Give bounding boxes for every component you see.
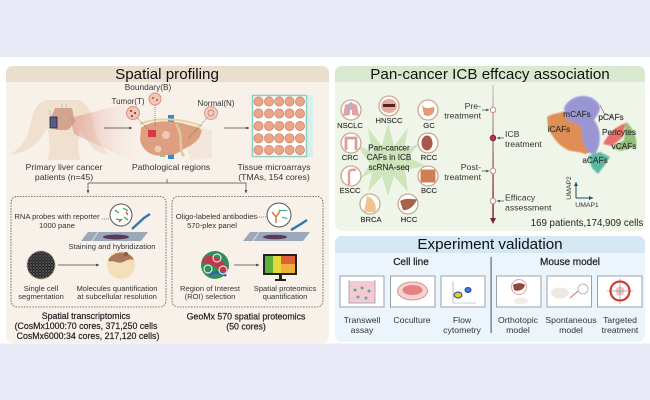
label: single cell segmentation: segmentation xyxy=(18,292,64,301)
label: primary liver cancer patients xyxy=(26,162,102,182)
heading: cell line: Cell line xyxy=(393,257,429,268)
icon: UMAP axes: UMAP1 xyxy=(575,202,599,209)
divider xyxy=(490,257,492,333)
card: transwell assay xyxy=(340,276,384,335)
label: region of interest selection xyxy=(180,284,241,301)
label: oligo-labeled antibodies xyxy=(176,212,257,230)
label: efficacy assessment xyxy=(497,192,552,212)
icon: BRCA breast xyxy=(360,194,382,224)
label: RNA probes xyxy=(14,212,100,230)
icon: GC stomach xyxy=(418,100,438,130)
heading: mouse model: Mouse model xyxy=(540,257,600,268)
labels: UMAP clusters: aCAFs xyxy=(582,155,608,165)
callout: tumor xyxy=(111,97,150,131)
icon: pipette xyxy=(291,220,307,230)
card: spontaneous model: Spontaneous xyxy=(545,315,597,325)
label: oligo-labeled antibodies: Oligo-labeled antibodies xyxy=(176,212,257,221)
text block: GeoMx summary xyxy=(187,312,306,332)
text block: GeoMx summary: (50 cores) xyxy=(226,322,266,332)
callout: boundary: Boundary(B) xyxy=(125,82,172,92)
label: spatial proteomics quantification: Spatial proteomics xyxy=(254,284,316,293)
label: region of interest selection: (ROI) selection xyxy=(185,292,235,301)
label: pathological regions: Pathological regions xyxy=(132,162,211,172)
card: transwell assay: Transwell xyxy=(344,315,380,325)
icon: HNSCC mouth: HNSCC xyxy=(375,116,403,125)
labels: UMAP clusters xyxy=(548,109,636,165)
label: pre-treatment: treatment xyxy=(444,110,482,120)
labels: UMAP clusters: iCAFs xyxy=(548,124,570,134)
label: primary liver cancer patients: patients (n=45) xyxy=(35,172,93,182)
icon: cell segmentation xyxy=(27,251,55,279)
icon: BCC skin: BCC xyxy=(421,186,438,195)
illustration: liver with pathological regions xyxy=(140,115,212,160)
panel: spatial transcriptomics workflow xyxy=(11,196,166,307)
panel: spatial profiling xyxy=(6,66,329,343)
heading bar: spatial profiling: Spatial profiling xyxy=(115,66,219,83)
icon: green star burst xyxy=(356,123,426,196)
text block: GeoMx summary: GeoMx 570 spatial proteomics xyxy=(187,312,306,322)
labels: UMAP clusters: Pericytes xyxy=(602,127,636,137)
label: efficacy assessment: assessment xyxy=(505,202,552,212)
card: spontaneous model: model xyxy=(559,325,583,335)
panel: experiment validation xyxy=(335,236,645,342)
label: pan-cancer CAFs: scRNA-seq xyxy=(369,163,409,172)
callout: boundary xyxy=(125,82,172,127)
card: targeted treatment: Targeted xyxy=(603,315,637,325)
labels: UMAP clusters: pCAFs xyxy=(598,112,624,122)
panel: spatial proteomics workflow xyxy=(172,196,323,307)
label: oligo-labeled antibodies: 570-plex panel xyxy=(187,221,237,230)
label: post-treatment: Post- xyxy=(461,162,481,172)
heading bar: experiment validation: Experiment validation xyxy=(417,236,563,253)
card: targeted treatment: treatment xyxy=(602,325,639,335)
icon: monitor heatmap xyxy=(263,254,297,281)
icon: antibody circle xyxy=(257,203,291,227)
callout: normal: Normal(N) xyxy=(198,99,235,108)
icon: GC stomach: GC xyxy=(423,121,435,130)
label: pan-cancer CAFs: CAFs in ICB xyxy=(367,153,411,162)
labels: UMAP clusters: vCAFs xyxy=(612,141,636,151)
icon: UMAP axes xyxy=(566,176,599,209)
card: targeted treatment xyxy=(598,276,642,335)
label: single cell segmentation: Single cell xyxy=(24,284,59,293)
panel: pan-cancer ICB efficacy association xyxy=(335,66,645,231)
label: pre-treatment xyxy=(444,101,489,120)
label: spatial proteomics quantification: quantification xyxy=(263,292,307,301)
chart: UMAP clusters xyxy=(547,96,636,174)
label: RNA probes: 1000 pane xyxy=(39,221,75,230)
labels: UMAP clusters: mCAFs xyxy=(563,109,591,119)
card: coculture xyxy=(390,276,435,325)
card: orthotopic model: model xyxy=(506,325,530,335)
text block: spatial transcriptomics summary: Spatial transcriptomics xyxy=(42,311,131,321)
illustration: patient torso xyxy=(10,100,140,165)
label: RNA probes: RNA probes with reporter xyxy=(14,212,100,221)
label: spatial proteomics quantification xyxy=(254,284,316,301)
icon: UMAP axes: UMAP2 xyxy=(566,176,573,200)
card: flow cytometry xyxy=(441,276,485,335)
arrow: patients to regions xyxy=(104,127,132,129)
card: transwell assay: assay xyxy=(351,325,374,335)
icon: glass slide xyxy=(81,232,148,241)
text block: spatial transcriptomics summary: CosMx6000:34 cores, 217,120 cells) xyxy=(17,331,159,341)
icon: NSCLC lung xyxy=(337,100,363,130)
label: single cell segmentation xyxy=(18,284,64,301)
label: ICB treatment xyxy=(497,129,542,149)
label: molecules quantification: Molecules quantification xyxy=(76,284,158,293)
arrow: left branch head xyxy=(87,183,89,193)
label: post-treatment: treatment xyxy=(444,172,482,182)
label: tissue microarrays: (TMAs, 154 cores) xyxy=(238,172,310,182)
label: ICB treatment: treatment xyxy=(505,139,542,149)
label: tissue microarrays: Tissue microarrays xyxy=(237,162,311,172)
card: orthotopic model: Orthotopic xyxy=(498,315,539,325)
callout: normal xyxy=(188,99,235,139)
icon: NSCLC lung: NSCLC xyxy=(337,121,363,130)
arrow: segmentation to quantification xyxy=(58,264,99,266)
label: ICB treatment: ICB xyxy=(505,129,520,139)
card: flow cytometry: cytometry xyxy=(443,325,481,335)
icon: pipette xyxy=(132,214,150,229)
label: patients and cells: 169 patients,174,909 cells xyxy=(531,218,643,229)
icon: BCC skin xyxy=(418,166,438,195)
label: region of interest selection: Region of Interest xyxy=(180,284,241,293)
label: tissue microarrays xyxy=(237,162,311,182)
label: molecules quantification xyxy=(76,284,158,301)
arrow: ROI to quantification xyxy=(234,264,259,266)
icon: CRC colon xyxy=(341,133,361,162)
heading bar: spatial profiling xyxy=(6,66,329,83)
label: efficacy assessment: Efficacy xyxy=(505,192,536,202)
card: orthotopic model xyxy=(496,276,541,335)
label: molecules quantification: at subcellular resolution xyxy=(77,292,157,301)
timeline xyxy=(444,85,552,224)
icon: molecule quantification xyxy=(107,251,135,279)
icon: HCC liver: HCC xyxy=(401,215,418,224)
icon: HCC liver xyxy=(398,194,418,224)
icon: ESCC esophagus xyxy=(339,166,361,195)
label: staining and hybridization: Staining and hybridization xyxy=(69,242,155,251)
label: pan-cancer CAFs: Pan-cancer xyxy=(368,144,410,152)
label: pre-treatment: Pre- xyxy=(465,101,481,111)
label: pan-cancer CAFs xyxy=(367,144,411,172)
icon: CRC colon: CRC xyxy=(342,153,359,162)
chart: tissue microarray grid xyxy=(252,95,313,157)
heading bar: experiment validation xyxy=(335,236,645,253)
arrow: branching tree xyxy=(88,179,246,193)
icon: HNSCC mouth xyxy=(375,96,403,125)
label: primary liver cancer patients: Primary liver cancer xyxy=(26,162,102,172)
callout: tumor: Tumor(T) xyxy=(111,97,145,106)
icon: ESCC esophagus: ESCC xyxy=(339,186,361,195)
icon: ROI tissue xyxy=(201,251,229,279)
heading bar: pan-cancer ICB efficacy: Pan-cancer ICB effcacy association xyxy=(370,66,610,83)
arrow: regions to microarrays xyxy=(224,127,249,129)
icon: BRCA breast: BRCA xyxy=(360,215,382,224)
label: post-treatment xyxy=(444,162,489,182)
icon: RCC kidney xyxy=(418,133,438,162)
text block: spatial transcriptomics summary xyxy=(15,311,159,341)
icon: RCC kidney: RCC xyxy=(421,153,438,162)
text block: spatial transcriptomics summary: (CosMx1000:70 cores, 371,250 cells xyxy=(15,321,158,331)
card: flow cytometry: Flow xyxy=(453,315,472,325)
icon: glass slide xyxy=(243,232,310,241)
icon: probe circle xyxy=(102,204,132,226)
card: coculture: Coculture xyxy=(393,315,431,325)
card: spontaneous model xyxy=(545,276,597,335)
